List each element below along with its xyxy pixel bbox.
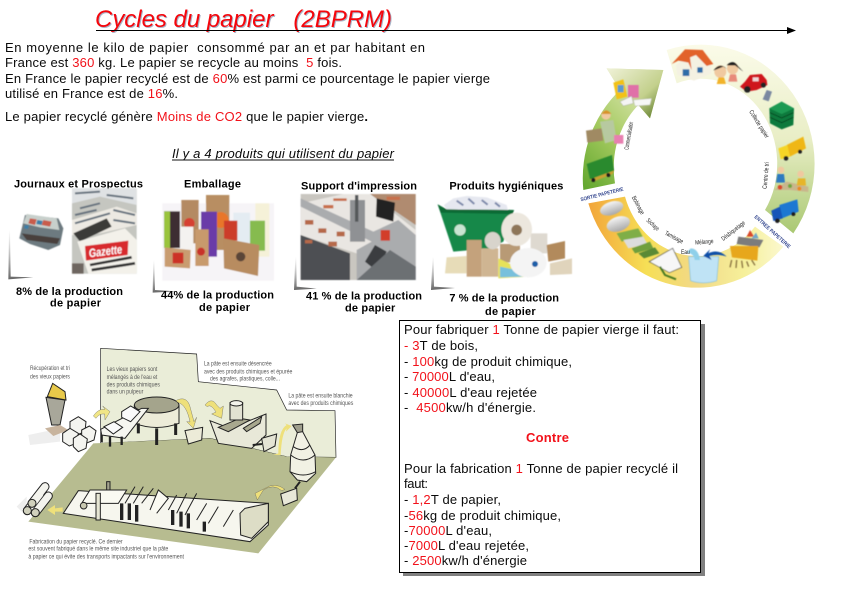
frame shadow [153, 260, 177, 293]
ring labels: Désbiquetage [720, 219, 747, 243]
heading: Support d'impression [301, 180, 417, 192]
icon: red car [740, 74, 772, 101]
icon: finished rolls [23, 487, 48, 517]
image: newspapers: Gazette [88, 242, 123, 260]
floor shadows [17, 428, 60, 517]
caption [161, 289, 274, 314]
ring labels: Séchage [645, 217, 661, 233]
icon: pulper tank [101, 397, 179, 447]
icon: bleaching tower [290, 424, 316, 482]
arrow: to pulper [93, 406, 110, 420]
factory wall [101, 348, 336, 457]
box [400, 320, 700, 572]
frame shadow [294, 257, 317, 290]
ring labels: Centre de tri [762, 162, 771, 189]
virgin paper list [404, 322, 679, 415]
panel: virgin versus recycled comparison [400, 320, 705, 576]
caption: 8% de la production [16, 286, 123, 298]
ring labels: Bobinage [630, 195, 646, 216]
factory labels: La pâte est ensuite blanchie [288, 392, 353, 399]
factory labels: avec des produits chimiques [288, 400, 353, 407]
icon: green truck [587, 155, 614, 182]
heading: Emballage [184, 178, 241, 190]
panel: printing support [294, 180, 422, 315]
icon: outlet tub [281, 482, 300, 506]
text block: introduction: En moyenne le kilo de papier consommé par an et par habitant en [5, 40, 425, 55]
frame shadow [8, 230, 33, 279]
text block: introduction: En France le papier recyclé est de 60% est parmi ce pourcentage le papier vierge [5, 71, 490, 86]
panel: newspapers and flyers [8, 178, 143, 310]
ring labels: Commercialisation [623, 121, 635, 150]
factory labels: avec des produits chimiques et épurée [204, 368, 293, 375]
ring labels: Eau [681, 249, 690, 256]
icon: sorting workers [774, 167, 808, 192]
icon: shopper [586, 110, 623, 144]
caption [306, 290, 422, 315]
caption: de papier [50, 298, 102, 310]
panel: hygiene products [431, 180, 572, 318]
recycled paper list: -7000L d'eau rejetée, [404, 538, 529, 553]
caption: 7 % de la production [449, 293, 559, 305]
caption [449, 293, 559, 318]
heading: Journaux et Prospectus [14, 178, 143, 190]
heading: Produits hygiéniques [449, 180, 563, 192]
recycled paper list: faut: [404, 476, 428, 491]
icon: paper bales [63, 417, 96, 452]
arrow: into de-inking [205, 401, 223, 418]
virgin paper list: - 3T de bois, [404, 338, 478, 353]
panel: packaging [153, 178, 274, 314]
factory labels: Récupération et tri [30, 365, 70, 372]
recycled paper list: Pour la fabrication 1 Tonne de papier recyclé il [404, 461, 678, 476]
icon: paper machine [598, 198, 682, 279]
icon: green bin [769, 102, 794, 129]
ring segment: arrow to consumer [583, 68, 663, 190]
factory labels: des agrafes, plastiques, colle... [210, 376, 280, 383]
panel: recycled paper factory diagram [17, 348, 353, 560]
caption: de papier [485, 306, 536, 318]
contre heading: Contre [526, 430, 569, 445]
ring labels [580, 109, 792, 256]
factory labels: Fabrication du papier recyclé. Ce dernier [29, 538, 123, 545]
box shadow [403, 324, 705, 576]
virgin paper list: - 70000L d'eau, [404, 369, 495, 384]
icon: water tank [687, 248, 727, 283]
recycled paper list: -56kg de produit chimique, [404, 508, 561, 523]
image: recycling bin and rolls [438, 196, 572, 278]
ring labels: Tamisage [663, 230, 685, 246]
image: digital cutting machine [301, 194, 416, 280]
icon: sorting bin [45, 383, 68, 436]
icon: shredder [730, 230, 763, 268]
caption [16, 286, 123, 310]
caption: de papier [345, 303, 396, 315]
virgin paper list: Pour fabriquer 1 Tonne de papier vierge il faut: [404, 322, 679, 337]
recycled paper list: - 1,2T de papier, [404, 492, 501, 507]
factory labels: à papier ce qui évite des transports impactants sur l'environnement [28, 553, 184, 560]
ring segment: manufacturing [588, 197, 783, 288]
icon: paper products [613, 79, 652, 106]
arrow: tower to machine [255, 485, 285, 500]
factory labels: des produits chimiques [107, 381, 160, 388]
icon: house [672, 49, 713, 81]
heading: four products: Il y a 4 produits qui utilisent du papier [172, 146, 395, 161]
factory labels: est souvent fabriqué dans le même site industriel que la pâte [28, 546, 169, 553]
caption: de papier [199, 302, 251, 314]
image: flyers stack [19, 214, 63, 250]
arrow: pulper to tub [176, 399, 197, 428]
ring labels: Collecte papier [747, 109, 770, 140]
icon: yellow truck [778, 137, 806, 161]
frame shadow [431, 257, 455, 290]
icon: de-inking unit [210, 401, 277, 452]
icon: couple [713, 62, 743, 84]
caption: 44% de la production [161, 289, 274, 301]
icon: pulp tub [185, 427, 203, 444]
virgin paper list: - 100kg de produit chimique, [404, 354, 572, 369]
virgin paper list: - 40000L d'eau rejetée [404, 385, 537, 400]
arrow: to bleaching [273, 423, 292, 455]
factory labels: mélangés à de l'eau et [107, 374, 158, 381]
text block: introduction [5, 40, 490, 124]
text block: introduction: Le papier recyclé génère Moins de CO2 que le papier vierge. [5, 109, 368, 124]
ring labels: Mélange [695, 238, 714, 247]
factory labels [28, 361, 353, 560]
factory labels: des vieux papiers [30, 373, 70, 380]
text block: introduction: utilisé en France est de 16%. [5, 86, 178, 101]
icon: blue truck [771, 199, 799, 223]
factory labels: Les vieux papiers sont [107, 366, 158, 373]
caption: 41 % de la production [306, 290, 422, 302]
text block: introduction: France est 360 kg. Le papier se recycle au moins 5 fois. [5, 55, 342, 70]
ring labels: SORTIE PAPETERIE [580, 187, 625, 203]
icon: paper machine [63, 482, 268, 542]
factory labels: dans un pulpeur [107, 388, 143, 395]
recycled paper list: -70000L d'eau, [404, 523, 492, 538]
arrow: to rolls [47, 505, 63, 515]
ring labels: ENTREE PAPETERIE [753, 214, 792, 250]
ring segment: collection [667, 45, 815, 233]
panel: recycling cycle ring [580, 45, 815, 288]
virgin paper list: - 4500kw/h d'énergie. [404, 400, 536, 415]
factory floor [28, 438, 336, 553]
title: Cycles du papier (2BPRM) [95, 6, 392, 33]
image: paper bags [162, 195, 274, 281]
recycled paper list [404, 461, 678, 568]
factory labels: La pâte est ensuite désencrée [204, 361, 272, 368]
arrow: title rule [96, 27, 796, 34]
recycled paper list: - 2500kw/h d'énergie [404, 553, 527, 568]
